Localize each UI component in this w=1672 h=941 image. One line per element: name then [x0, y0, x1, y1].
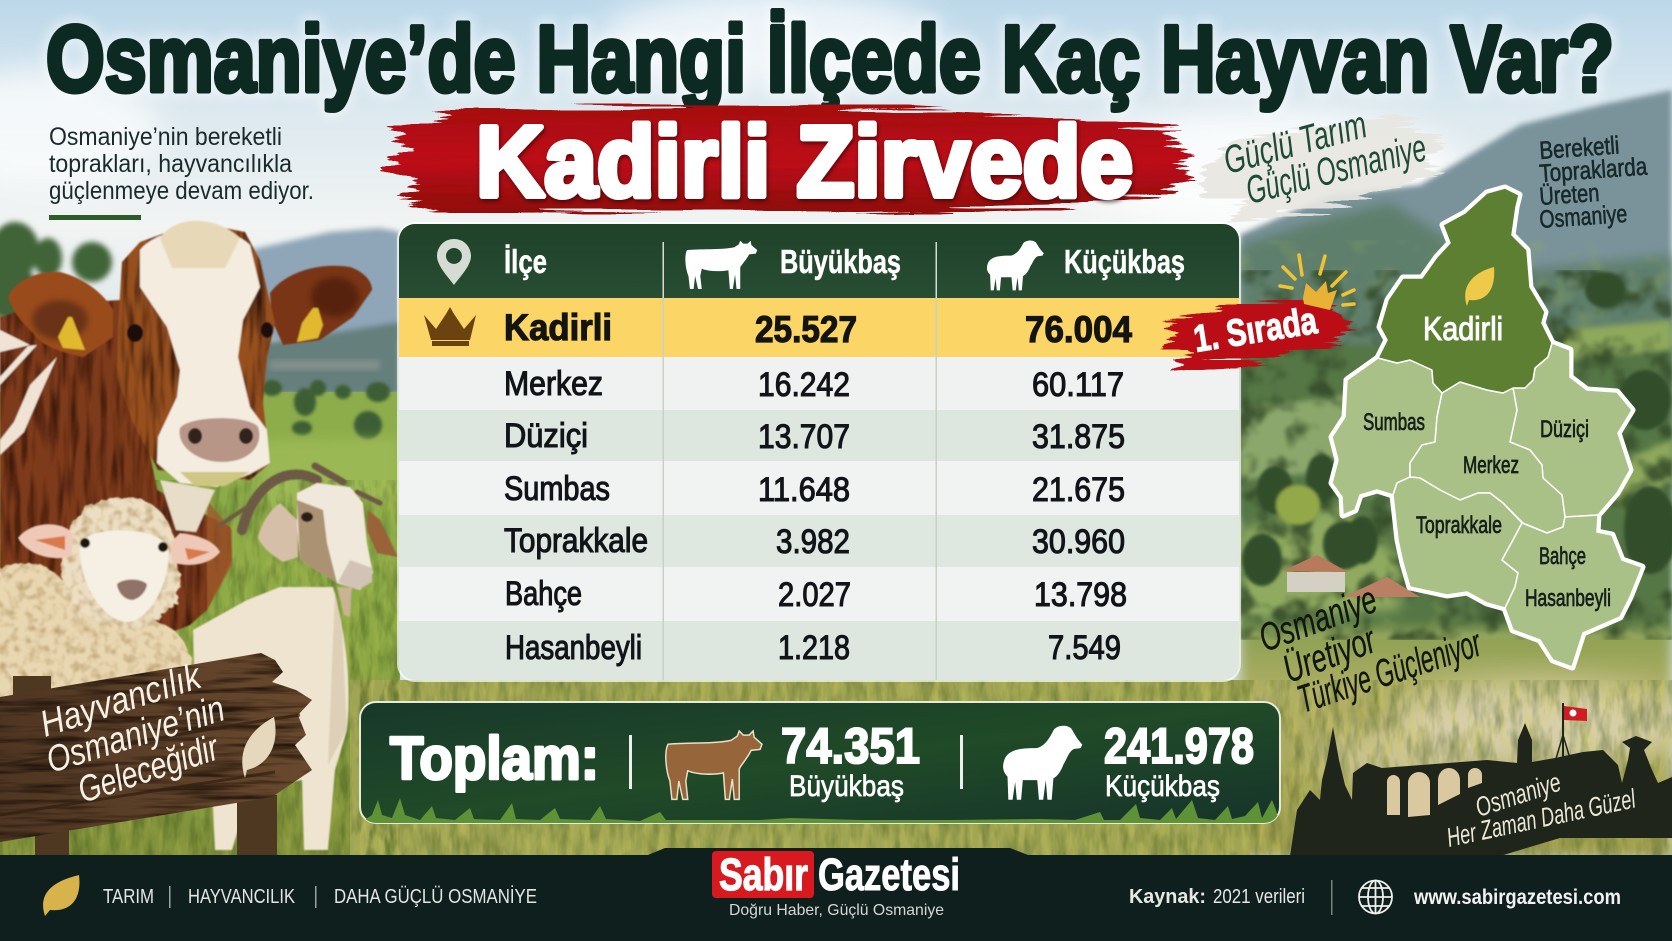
slogan: Bereketli Topraklarda: Bereketli [1538, 131, 1620, 165]
icon: location pin [437, 239, 471, 285]
row: Toprakkale: 30.960 [1032, 523, 1125, 561]
row: Sumbas: Sumbas [504, 470, 610, 508]
footer tags: HAYVANCILIK [188, 886, 296, 908]
sign text: Geleceğidir [73, 726, 225, 811]
houses [1282, 555, 1420, 597]
row: Bahçe: Bahçe [505, 575, 582, 613]
stat: 74.351 Büyükbaş: 74.351 [781, 718, 920, 774]
row: Merkez: 60.117 [1032, 366, 1124, 404]
cow [0, 221, 372, 700]
wooden sign [0, 653, 312, 857]
row: Hasanbeyli [505, 629, 1121, 667]
row: Bahçe: 2.027 [778, 576, 851, 614]
header: Büyükbaş: Büyükbaş [780, 243, 901, 280]
sign text: Hayvancılık [35, 655, 208, 745]
row: Bahçe: 13.798 [1034, 576, 1127, 614]
footer tags: DAHA GÜÇLÜ OSMANİYE [334, 885, 537, 908]
logo: Sabır Gazetesi [712, 849, 960, 919]
map labels: Sumbas [1363, 409, 1425, 436]
row: Bahçe [505, 575, 1127, 614]
row: Hasanbeyli: 7.549 [1048, 629, 1121, 667]
callout: 1. Sırada: 1. Sırada [1191, 300, 1321, 361]
silhouette: Osmaniye skyline [1290, 703, 1672, 856]
map labels [1363, 310, 1611, 612]
goat horns [220, 466, 380, 530]
icon: gold crown with rays [1280, 255, 1354, 310]
data table [397, 222, 1241, 682]
cow ears [8, 266, 372, 357]
totals panel [360, 702, 1280, 826]
slogan: Osmaniye Üretiyor [1253, 578, 1488, 722]
sign text [35, 655, 229, 811]
row: Merkez: 16.242 [758, 366, 850, 404]
logo: Sabır Gazetesi: Sabır [719, 849, 808, 900]
source note: Kaynak: [1129, 886, 1206, 908]
row: Kadirli [424, 307, 1132, 350]
grey brush slogan: Güçlü Tarım [1219, 103, 1371, 183]
grey brush slogan: Güçlü Osmaniye [1242, 126, 1431, 213]
sign posts [13, 676, 277, 857]
row: Kadirli: Kadirli [504, 307, 612, 348]
map: Toprakkale [1393, 477, 1522, 608]
icon: white sheep [1003, 726, 1082, 800]
row: Düziçi [504, 417, 1125, 456]
row: Merkez [504, 365, 1124, 404]
row: Düziçi: 31.875 [1032, 418, 1125, 456]
callout: 1. Sırada [1160, 255, 1354, 368]
map: Bahçe and Hasanbeyli [1502, 515, 1642, 667]
footer [0, 848, 1672, 941]
stat: 241.978 Küçükbaş: Küçükbaş [1105, 770, 1220, 803]
icon: map leaf [1465, 267, 1494, 306]
icon: sheep [987, 240, 1044, 290]
row: Sumbas: 21.675 [1032, 471, 1125, 509]
map: Kadirli [1378, 188, 1552, 393]
table header [437, 239, 1185, 290]
row: Sumbas [504, 470, 1125, 509]
map labels: Merkez [1463, 452, 1519, 479]
map: Merkez [1410, 382, 1565, 533]
map outer white outline [1332, 188, 1642, 667]
intro text: Osmaniye’nin bereketli [49, 123, 282, 151]
header: İlçe: İlçe [504, 243, 547, 280]
row: Kadirli: 25.527 [755, 309, 857, 350]
icon: brown cow [666, 731, 762, 799]
stat: 241.978 Küçükbaş: 241.978 [1104, 718, 1254, 774]
sheep ears [18, 524, 220, 565]
icon: Turkish flag [1555, 703, 1587, 763]
map labels: Düziçi [1540, 416, 1589, 443]
icon: globe [1359, 880, 1392, 914]
row: Hasanbeyli: 1.218 [778, 629, 850, 667]
slogan: Osmaniye Üretiyor: Osmaniye [1253, 578, 1383, 660]
slogan: Bereketli Topraklarda: Osmaniye [1538, 200, 1628, 234]
map labels: Bahçe [1539, 543, 1586, 570]
icon: footer leaf [43, 875, 79, 916]
district map [1332, 188, 1642, 667]
goat ears [258, 503, 398, 562]
row: Sumbas: 11.648 [758, 471, 850, 509]
cow ear tags [58, 308, 323, 350]
label: Toplam: Toplam: [390, 725, 599, 792]
goat [193, 466, 398, 850]
map labels: Hasanbeyli [1525, 585, 1611, 612]
footer tags: TARIM [103, 886, 154, 908]
intro text: güçlenmeye devam ediyor. [49, 177, 314, 205]
silhouette caption: Osmaniye [1472, 767, 1565, 823]
slogan: Osmaniye Üretiyor: Üretiyor [1277, 618, 1383, 691]
table rows [504, 365, 1127, 667]
grey brush slogan [1200, 103, 1445, 222]
row: Hasanbeyli: Hasanbeyli [505, 629, 642, 667]
row: Toprakkale: 3.982 [776, 523, 850, 561]
source note [1129, 886, 1305, 908]
header: Küçükbaş: Küçükbaş [1064, 243, 1185, 280]
map: Düziçi [1510, 343, 1632, 517]
slogan: Bereketli Topraklarda [1538, 131, 1648, 234]
stat: 241.978 Küçükbaş [1104, 718, 1254, 803]
logo: Sabır Gazetesi: Gazetesi [818, 849, 960, 900]
slogan: Bereketli Topraklarda: Üreten [1538, 179, 1600, 211]
slogan: Osmaniye Üretiyor: Türkiye Güçleniyor [1292, 622, 1488, 722]
stat: 74.351 Büyükbaş: Büyükbaş [789, 770, 904, 803]
row: Düziçi: 13.707 [758, 418, 850, 456]
map labels: Toprakkale [1416, 512, 1502, 539]
icon: cow [685, 241, 757, 289]
logo: Sabır Gazetesi: Doğru Haber, Güçlü Osmaniye [729, 902, 944, 919]
map labels: Kadirli [1423, 310, 1503, 347]
slogan: Bereketli Topraklarda: Topraklarda [1538, 153, 1648, 188]
website: www.sabirgazetesi.com [1413, 886, 1621, 909]
intro text [49, 123, 314, 220]
footer tags [103, 885, 537, 908]
icon: sign leaf [242, 717, 276, 778]
headline banner: Kadirli Zirvede: Kadirli Zirvede [476, 106, 1133, 218]
row: Merkez: Merkez [504, 365, 603, 403]
grass strip [366, 798, 1278, 823]
row: Düziçi: Düziçi [504, 417, 588, 455]
stat: 74.351 Büyükbaş [781, 718, 920, 803]
row: Toprakkale: Toprakkale [504, 522, 648, 560]
map: Sumbas [1332, 358, 1442, 515]
source note: 2021 verileri [1213, 886, 1305, 908]
sheep [0, 497, 220, 725]
intro text: toprakları, hayvancılıkla [49, 150, 292, 178]
sign text: Osmaniye’nin [41, 688, 229, 781]
row: Kadirli: 76.004 [1025, 309, 1132, 350]
icon: crown [424, 307, 476, 346]
row: Toprakkale [504, 522, 1125, 561]
